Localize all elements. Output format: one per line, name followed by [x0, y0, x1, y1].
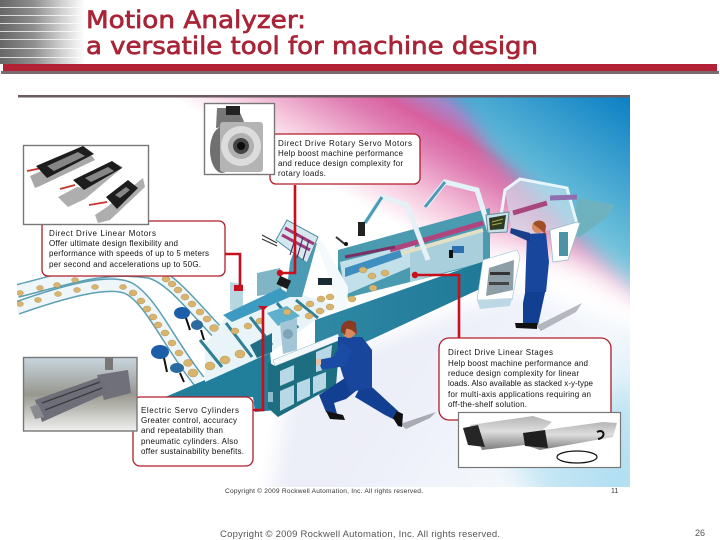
title	[86, 6, 538, 60]
leader: linear stages	[412, 272, 459, 338]
callout: linear motors: Direct Drive Linear Motors	[49, 229, 156, 238]
center head	[223, 220, 348, 354]
callout: rotary servo motors: Help boost machine performance	[278, 149, 404, 158]
title: a versatile tool for machine design	[86, 32, 538, 60]
inset: electric servo cylinder	[24, 358, 137, 431]
callout: electric servo cylinders	[133, 397, 253, 466]
callout: linear motors: Offer ultimate design flexibility and	[49, 239, 178, 248]
inner page number: 11	[611, 488, 618, 495]
inner copyright: Copyright © 2009 Rockwell Automation, Inc. All rights reserved.	[225, 487, 423, 495]
callout: linear stages: Direct Drive Linear Stages	[448, 348, 553, 357]
leader: rotary motors	[277, 185, 295, 276]
sensors	[336, 222, 365, 246]
control cabinet by kneeling operator	[268, 334, 340, 417]
far end of machine	[500, 179, 615, 262]
callout: linear stages	[439, 338, 611, 420]
callout: electric servo cylinders: pneumatic cylinders. Also	[141, 437, 239, 446]
blue actuators	[151, 307, 204, 382]
callout: linear motors: per second and accelerations up to 50G.	[49, 260, 201, 269]
back wall and deck	[338, 208, 490, 300]
callout: rotary servo motors: and reduce design complexity for	[278, 159, 403, 168]
callout: rotary servo motors	[270, 134, 420, 184]
conveyor deck	[200, 290, 335, 382]
operator standing	[510, 220, 582, 331]
leader: linear motors	[225, 254, 243, 291]
callout: electric servo cylinders: Electric Servo Cylinders	[141, 406, 239, 415]
callout: linear stages: reduce design complexity for linear	[448, 369, 579, 378]
title: Motion Analyzer:	[86, 6, 306, 34]
callout: linear stages: off-the-shelf solution.	[448, 400, 527, 409]
illustration: background	[184, 98, 630, 487]
callout: electric servo cylinders: Greater control, accuracy	[141, 416, 237, 425]
illustration: machine	[16, 179, 615, 429]
conveyor left belts	[17, 276, 220, 385]
footer copyright: Copyright © 2009 Rockwell Automation, Inc. All rights reserved.	[220, 529, 500, 540]
callout: electric servo cylinders: and repeatability than	[141, 426, 223, 435]
callout: linear motors: performance with speeds of up to 5 meters	[49, 249, 209, 258]
title rule	[1, 64, 719, 74]
arches	[365, 182, 490, 260]
callout: rotary servo motors: Direct Drive Rotary Servo Motors	[278, 139, 412, 148]
leader: servo cylinders	[253, 306, 268, 410]
callout: linear stages: Help boost machine performance and	[448, 359, 588, 368]
callout: rotary servo motors: rotary loads.	[278, 169, 326, 178]
operator kneeling	[316, 321, 436, 429]
wedge base wall	[163, 352, 276, 412]
callout: linear motors	[42, 221, 225, 276]
leader lines	[225, 185, 459, 410]
footer page number: 26	[695, 528, 705, 538]
callout: linear stages: loads. Also available as stacked x-y-type	[448, 379, 594, 388]
illustration top rule	[18, 95, 630, 98]
main teal wall	[315, 262, 482, 352]
inset: linear stages	[458, 412, 620, 468]
cabinet by standing operator	[477, 250, 520, 309]
product dots	[16, 267, 389, 377]
inset: linear motors	[24, 146, 148, 224]
monitor	[486, 212, 509, 233]
callout: linear stages: for multi-axis applications requiring an	[448, 390, 591, 399]
callout: electric servo cylinders: offer sustainability benefits.	[141, 447, 244, 456]
header stripe block	[0, 0, 85, 64]
inset: rotary servo motor	[204, 104, 274, 174]
